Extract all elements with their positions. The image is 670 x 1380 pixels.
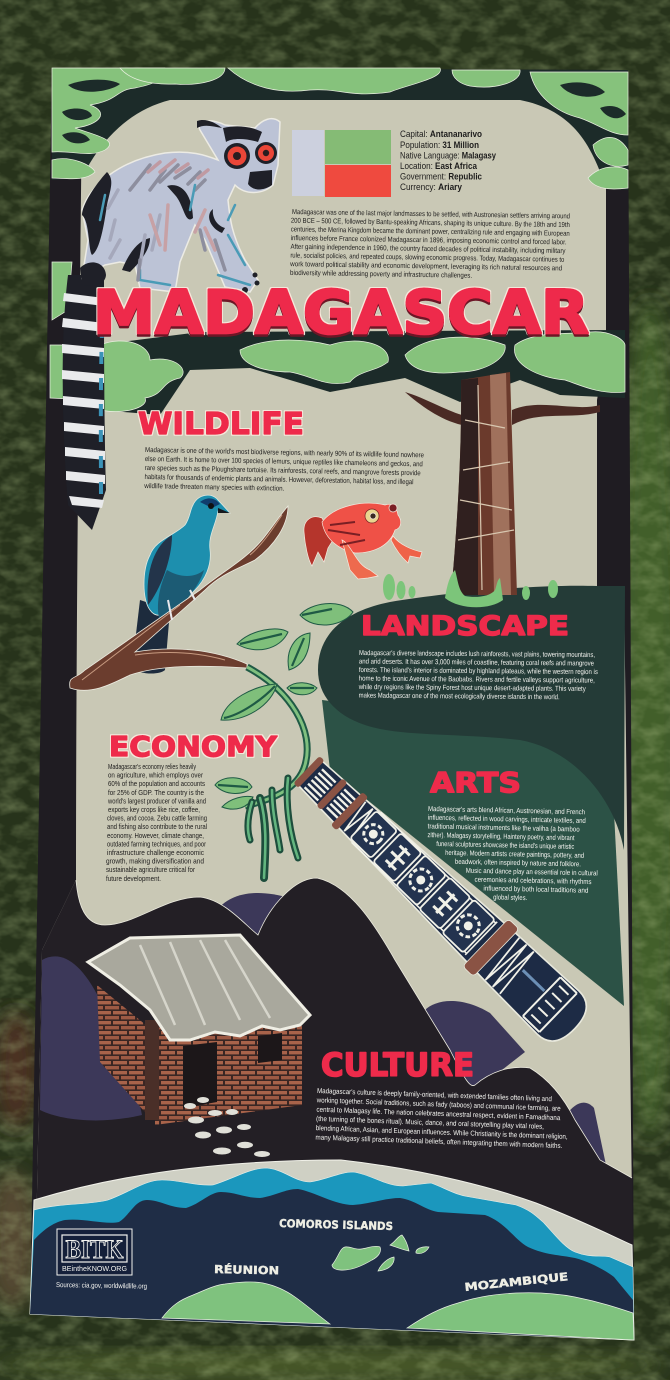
icon: valiha flute (283, 746, 598, 1052)
facts list: Location: East Africa (400, 160, 478, 171)
map: sea band (30, 1160, 634, 1340)
panel: culture dark hills (36, 878, 633, 1250)
text block: arts: influenced by both local traditions and (483, 884, 588, 895)
text block: landscape (358, 649, 598, 702)
icon: frog (304, 503, 422, 579)
text block: economy: sustainable agriculture critical for (106, 866, 196, 874)
icon: lemur (80, 119, 280, 293)
icon: lemur tail (62, 275, 106, 530)
text block: culture: (the turning of the bones ritual). Music, dance, and oral storytelling play vital roles, (316, 1115, 544, 1131)
text block: economy: on agriculture, which employs over (108, 772, 204, 780)
text block: introduction: influences before France colonized Madagascar in 1896, imposing economic control and forced labor. (291, 234, 567, 246)
canopy: middle dark leaves (50, 262, 625, 415)
text block: wildlife (143, 446, 424, 495)
text block: economy: exports key crops like rice, coffee, (108, 806, 200, 814)
heading: wildlife: WILDLIFE (138, 407, 304, 442)
text block: economy: future development. (106, 875, 161, 883)
icon: baobab tree trunk (405, 372, 600, 595)
text block: economy: 60% of the population and accounts (108, 780, 205, 788)
text block: introduction (289, 208, 570, 281)
label: Réunion: RÉUNION (214, 1263, 279, 1277)
heading: landscape: LANDSCAPE (361, 611, 569, 642)
text block: introduction: centuries, the Merina Kingdom became the dominant power, centralizing rule and engaging with European (291, 225, 570, 238)
text block: arts (426, 805, 599, 904)
icon: bird (132, 495, 230, 674)
icon: stepping stones (184, 1097, 270, 1157)
label: Comoros Islands: COMOROS ISLANDS (279, 1217, 393, 1233)
facts list: Population: 31 Million (400, 139, 479, 150)
panel: arts green (322, 700, 624, 1006)
icon: vine and leaves (215, 604, 353, 878)
text block: wildlife: wildlife trade threaten many species with extinction. (143, 482, 284, 493)
text block: landscape: forests. The island's interior is dominated by highland plateaus, while the western region is (359, 666, 598, 676)
panel: landscape dark green (318, 586, 625, 850)
heading: culture: CULTURE (321, 1046, 474, 1084)
text block: arts: Madagascar's arts blend African, Austronesian, and French (428, 805, 585, 816)
text block: introduction: 200 BCE – 500 CE, followed by Bantu-speaking Africans, shaping its unique culture. By the 18th and 19th (291, 217, 570, 229)
logo: BITK: BEintheKNOW.ORG (62, 1264, 127, 1273)
text block: economy: growth, making diversification and (106, 858, 204, 866)
label: Mozambique: MOZAMBIQUE (464, 1270, 569, 1294)
heading: economy: ECONOMY (109, 730, 278, 763)
panel: cream background (36, 100, 632, 1240)
text block: arts: funeral sculptures showcase the island's unique artistic (436, 840, 575, 851)
panel: purple hills behind (215, 893, 606, 1165)
canopy: top leaves (52, 68, 628, 190)
text block: introduction: After gaining independence in 1960, the country faced decades of political instability, including military (290, 243, 566, 255)
text block: introduction: biodiversity while addressing poverty and infrastructure challenges. (290, 269, 472, 280)
map: land masses (162, 1235, 634, 1340)
heading: arts: ARTS (430, 766, 521, 799)
facts list: Native Language: Malagasy (400, 150, 497, 160)
text block: introduction: rule, socialist policies, and repeated coups, slowing economic progress. Today, Madagascar continues to (290, 251, 564, 264)
sources note: Sources: cia.gov, worldwildlife.org (56, 1281, 147, 1291)
text block: culture (314, 1087, 569, 1150)
text block: culture: many Malagasy still practice traditional beliefs, often integrating them with modern faiths. (315, 1133, 562, 1150)
text block: landscape: home to the iconic Avenue of the Baobabs. Rivers and fertile valleys support agriculture, (359, 674, 595, 685)
text block: wildlife: else on Earth. It is home to over 100 species of lemurs, unique reptiles like chameleons and geckos, and (145, 455, 423, 468)
text block: arts: traditional musical instruments like the valiha (a bamboo (428, 822, 580, 834)
text block: economy: Madagascar's economy relies heavily (108, 763, 196, 771)
text block: culture: central to Malagasy life. The nation celebrates ancestral respect, evident in Famadihana (316, 1106, 560, 1122)
icon: grass tufts (383, 570, 558, 607)
text block: economy: cloves, and cocoa. Zebu cattle farming (107, 815, 207, 823)
facts list: Government: Republic (400, 170, 482, 182)
text block: wildlife: rare species such as the Ploughshare tortoise. Its rainforests, coral reefs, and mangrove forests provide (145, 464, 421, 477)
icon: purple hill left (40, 956, 142, 1120)
text block: culture: Madagascar's culture is deeply family-oriented, with extended families often living and (317, 1087, 552, 1103)
text block: arts: zither). Malagasy storytelling, Hainteny poetry, and vibrant (427, 831, 575, 842)
text block: arts: Music and dance play an essential role in cultural (466, 867, 598, 877)
text block: culture: working together. Social traditions, such as fady (taboos) and communal rice farming, are (316, 1096, 561, 1113)
logo: BITK (57, 1229, 132, 1275)
text block: wildlife: habitats for thousands of endemic plants and animals. However, deforestation, habitat loss, and illegal (144, 473, 414, 486)
text block: culture: blending African, Asian, and European influences. While Christianity is the dominant religion, (316, 1124, 568, 1141)
text block: economy: for 25% of GDP. The country is the (108, 789, 204, 797)
text block: economy: economy. However, climate change, (107, 832, 204, 840)
text block: economy: and fishing also contribute to the rural (107, 823, 207, 831)
text block: arts: influences, reflected in wood carvings, intricate textiles, and (428, 814, 586, 825)
text block: arts: heritage. Modern artists create paintings, pottery, and (445, 849, 584, 860)
text block: introduction: Madagascar was one of the last major landmasses to be settled, with Austronesian settlers arriving around (292, 208, 570, 220)
facts list: Currency: Ariary (400, 181, 463, 192)
text block: economy: world's largest producer of vanilla and (107, 797, 206, 805)
text block: landscape: Madagascar's diverse landscape includes lush rainforests, vast plains, towering mountains, (359, 649, 595, 659)
text block: wildlife: Madagascar is one of the world's most biodiverse regions, with nearly 90% of its wildlife found nowhere (145, 446, 424, 459)
text block: economy: infrastructure challenge economic (107, 849, 204, 857)
text block: arts: global styles. (493, 893, 527, 902)
text block: economy: outdated farming techniques, and poor (107, 840, 207, 848)
facts list (400, 128, 497, 192)
text block: landscape: while dry regions like the Spiny Forest host unique desert-adapted plants. This variety (358, 683, 586, 693)
text block: landscape: makes Madagascar one of the most ecologically diverse islands in the world. (359, 691, 560, 701)
flag of Madagascar (292, 130, 391, 197)
title: MADAGASCAR (93, 278, 589, 348)
icon: hut (88, 935, 310, 1125)
facts list: Capital: Antananarivo (400, 128, 482, 139)
text block: arts: beadwork, often inspired by nature and folklore. (455, 858, 581, 868)
icon: branch (70, 506, 288, 690)
text block: economy (106, 763, 207, 883)
text block: arts: ceremonies and celebrations, with rhythms (474, 876, 592, 886)
text block: introduction: work toward political stability and economic development, leveraging its rich natural resources and (289, 260, 562, 272)
logo: BITK: BITK (66, 1235, 124, 1264)
text block: landscape: and arid deserts. It has over 3,000 miles of coastline, featuring coral reefs and mangrove (359, 657, 594, 668)
